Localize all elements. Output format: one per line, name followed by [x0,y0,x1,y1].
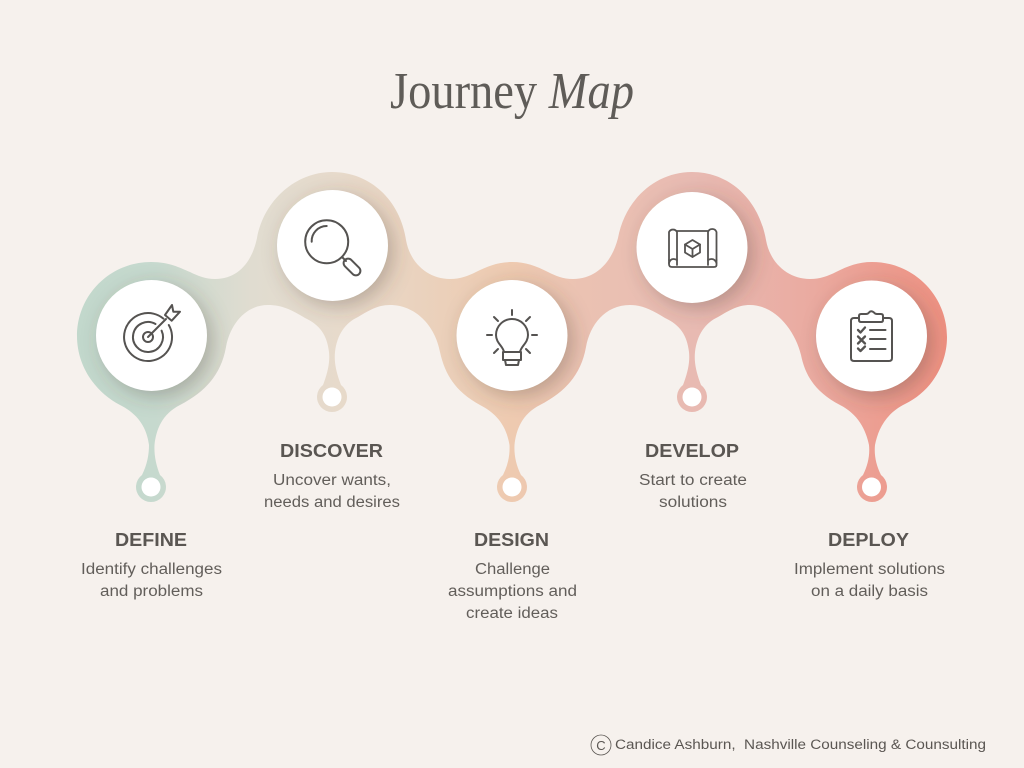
description: define: and problems [100,583,203,600]
icon: copyright [591,735,611,755]
step: deploy [794,280,945,600]
connected journey ribbon [77,172,947,502]
heading: deploy: DEPLOY [828,530,909,550]
credit text: Candice Ashburn, Nashville Counseling & Counsulting [615,737,986,752]
footer credit [591,735,986,755]
heading: discover: DISCOVER [280,441,383,461]
description: design [448,561,577,622]
icon: magnifying glass [305,220,362,277]
step: design [448,280,577,622]
step: discover [264,190,400,511]
icon: target with arrow [124,305,180,361]
description: develop: Start to create [639,472,747,489]
description: design: Challenge [475,561,550,578]
description: discover: Uncover wants, [273,472,391,489]
heading: develop: DEVELOP [645,441,739,461]
description: develop: solutions [659,494,727,511]
step: develop [636,192,748,511]
description: deploy: on a daily basis [811,583,928,600]
step: define [81,280,222,600]
icon: copyright: C [596,738,606,753]
description: define: Identify challenges [81,561,222,578]
heading: define: DEFINE [115,530,187,550]
description: deploy: Implement solutions [794,561,945,578]
description: deploy [794,561,945,600]
icon: light bulb [487,310,537,365]
icon: blueprint with cube [669,229,717,267]
description: design: assumptions and [448,583,577,600]
icon: clipboard checklist [851,311,892,361]
infographic canvas [77,74,985,756]
description: design: create ideas [466,605,558,622]
description: discover [264,472,400,511]
title: Journey Map [390,63,634,120]
description: discover: needs and desires [264,494,400,511]
description: develop [639,472,747,511]
heading: design: DESIGN [474,530,549,550]
description: define [81,561,222,600]
